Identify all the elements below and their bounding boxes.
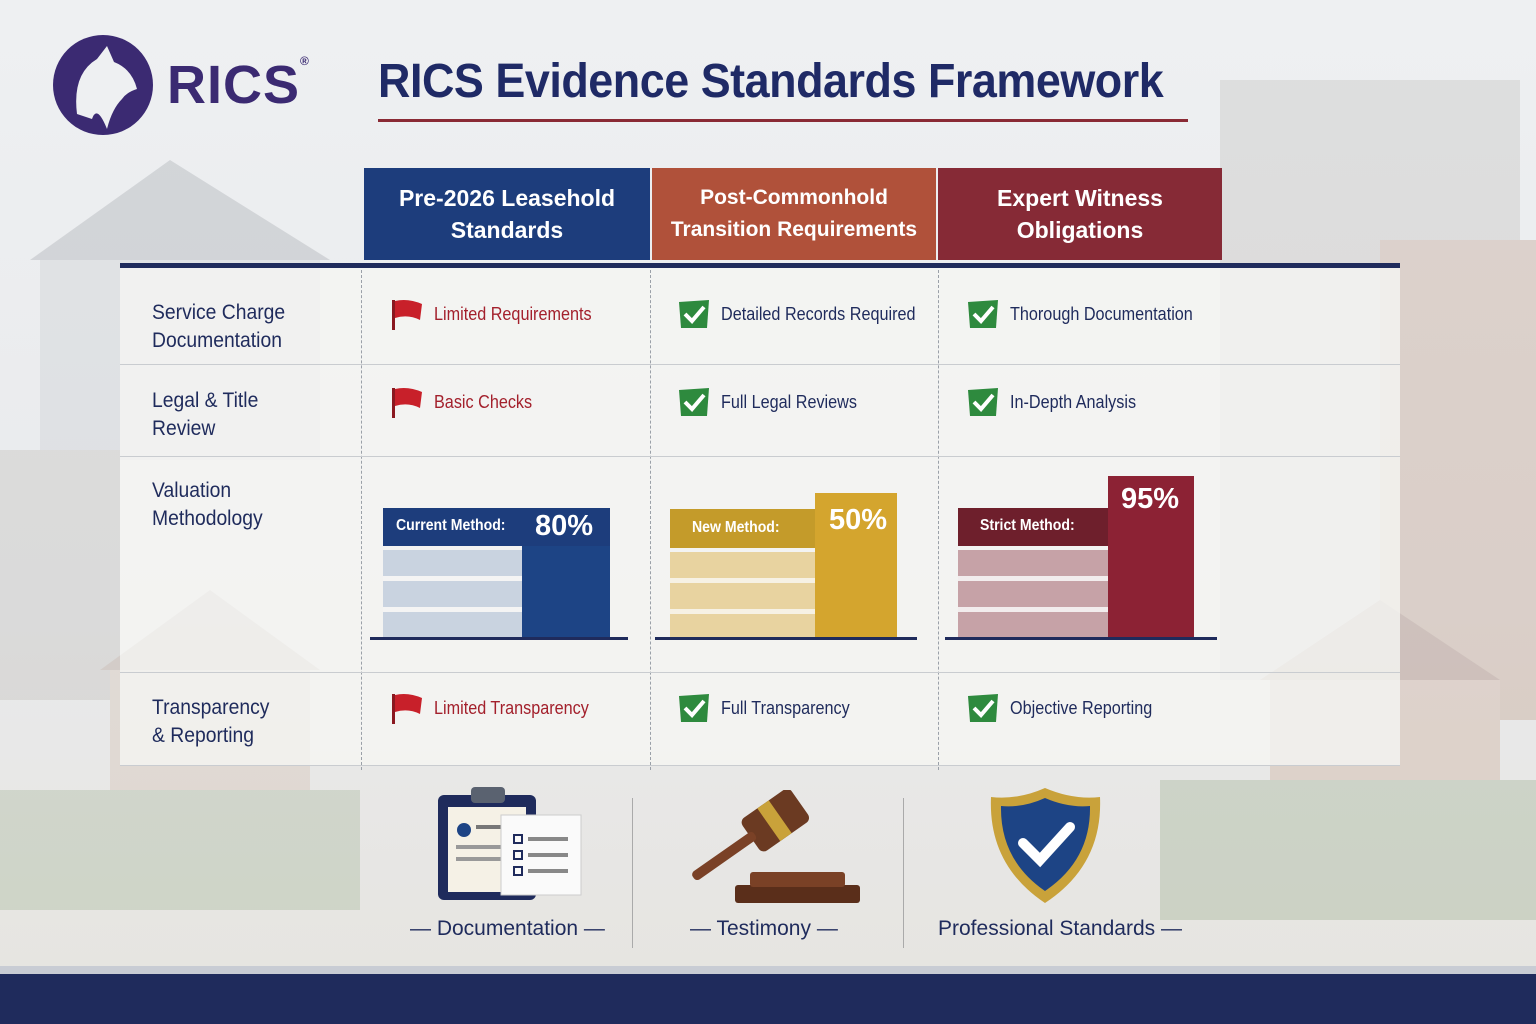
label: testimony: — Testimony — [690,917,838,940]
icon: documentation [438,787,582,900]
row 1 cells: Limited Requirements [434,304,592,324]
chart: new 50% [655,493,917,640]
header: pre-2026: Standards [451,217,563,243]
text: Detailed Records Required [721,304,916,324]
text: In-Depth Analysis [1010,392,1136,412]
row 2 cells: Basic Checks [434,392,532,412]
chart: current 80%: 80% [535,510,593,542]
row 2 cells [392,388,532,418]
table panel [120,265,1400,765]
chart: strict 95%: Strict Method: [980,517,1075,534]
row 4 cells: Limited Transparency [434,698,589,718]
chart: strict 95%: 95% [1121,483,1179,515]
logo [53,35,310,135]
footer band [0,966,1536,1024]
text: Review [152,417,215,440]
label: documentation: — Documentation — [410,917,605,940]
text: Thorough Documentation [1010,304,1193,324]
text: Objective Reporting [1010,698,1152,718]
header: expert witness: Expert Witness [997,185,1163,211]
chart: current 80%: Current Method: [396,517,506,534]
background houses left [0,160,360,910]
header: post-commonhold [652,168,936,260]
row 4 cells [392,694,589,724]
text: Methodology [152,507,263,530]
chart: new 50%: 50% [829,504,887,536]
row 1 cells [392,300,592,330]
text: Full Transparency [721,698,850,718]
header: pre-2026: Pre-2026 Leasehold [399,185,615,211]
icon: shield [990,788,1100,903]
logo: RICS® [167,54,310,115]
chart: current 80% [370,508,628,640]
row labels: Service Charge [152,301,285,324]
chart: strict 95% [945,476,1217,640]
text: Legal & Title [152,389,258,412]
text: Full Legal Reviews [721,392,857,412]
header: post-commonhold: Post-Commonhold [700,186,888,209]
header: pre-2026 [364,168,650,260]
text: Valuation [152,479,231,502]
text: & Reporting [152,724,254,747]
label: professional standards: Professional Standards — [938,917,1182,940]
icon: gavel [692,790,860,903]
chart: new 50%: New Method: [692,519,780,536]
title: RICS Evidence Standards Framework [378,55,1163,108]
header: expert witness [938,168,1222,260]
header: post-commonhold: Transition Requirements [671,218,917,241]
row labels [152,301,285,352]
row labels: Documentation [152,329,282,352]
text: Transparency [152,696,269,719]
background buildings right [1160,80,1536,920]
header: expert witness: Obligations [1017,217,1143,243]
